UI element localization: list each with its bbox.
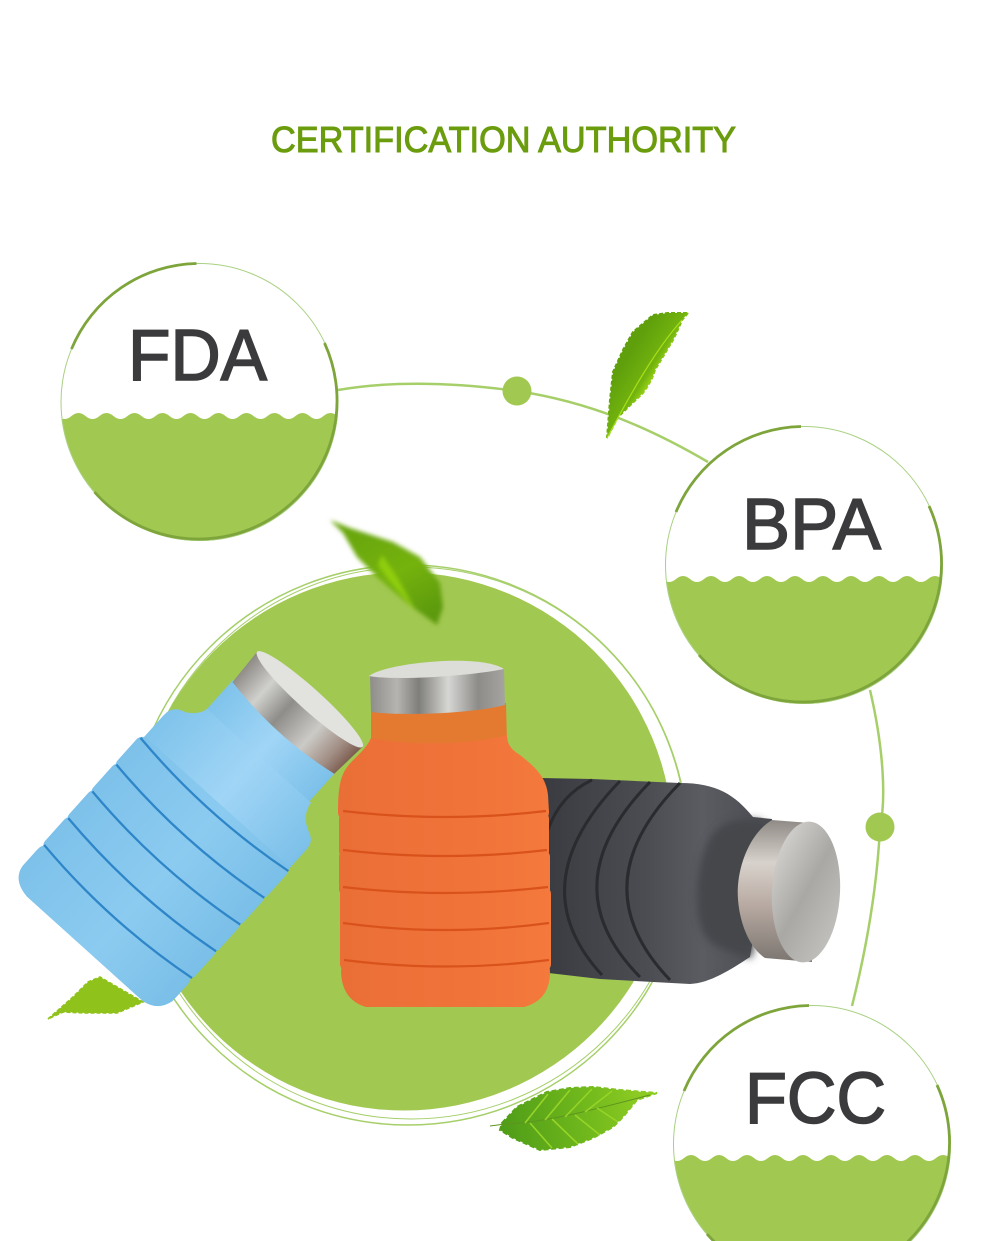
blue bottle shoulder [142,690,332,870]
orange bottle cap [369,661,505,714]
central green circle with rings [128,565,688,1125]
orange bottle grooves [343,811,549,966]
orange bottle neck [371,703,507,745]
badge label: BPA [742,485,881,565]
badge: FCC [670,1005,964,1241]
badge label: FCC [745,1059,886,1139]
leaf: top right [607,313,688,438]
leaf: bottom centre [490,1087,657,1150]
bottle: grey [540,778,844,984]
grey bottle body [540,778,772,984]
blue bottle cap [227,644,370,780]
grey bottle neck [697,820,772,958]
leaf: lower left [48,977,143,1019]
grey bottle cap [738,820,844,964]
blue bottle grooves [39,738,288,983]
connector: BPA to FCC with node [852,690,894,1006]
badge: BPA [662,426,956,715]
orange bottle shoulder [338,735,549,820]
blue bottle bands [9,734,292,1016]
badge label: FDA [128,316,267,396]
title: CERTIFICATION AUTHORITY [271,119,736,160]
grey bottle grooves [548,780,680,980]
blue bottle neck [194,679,336,816]
orange bottle bands [339,812,551,1007]
badge: FDA [58,263,352,552]
bottle: blue [9,623,392,1016]
leaf: blurred centre [330,520,443,625]
connector: FDA to BPA with node [338,376,708,462]
bottle: orange [338,661,551,1007]
